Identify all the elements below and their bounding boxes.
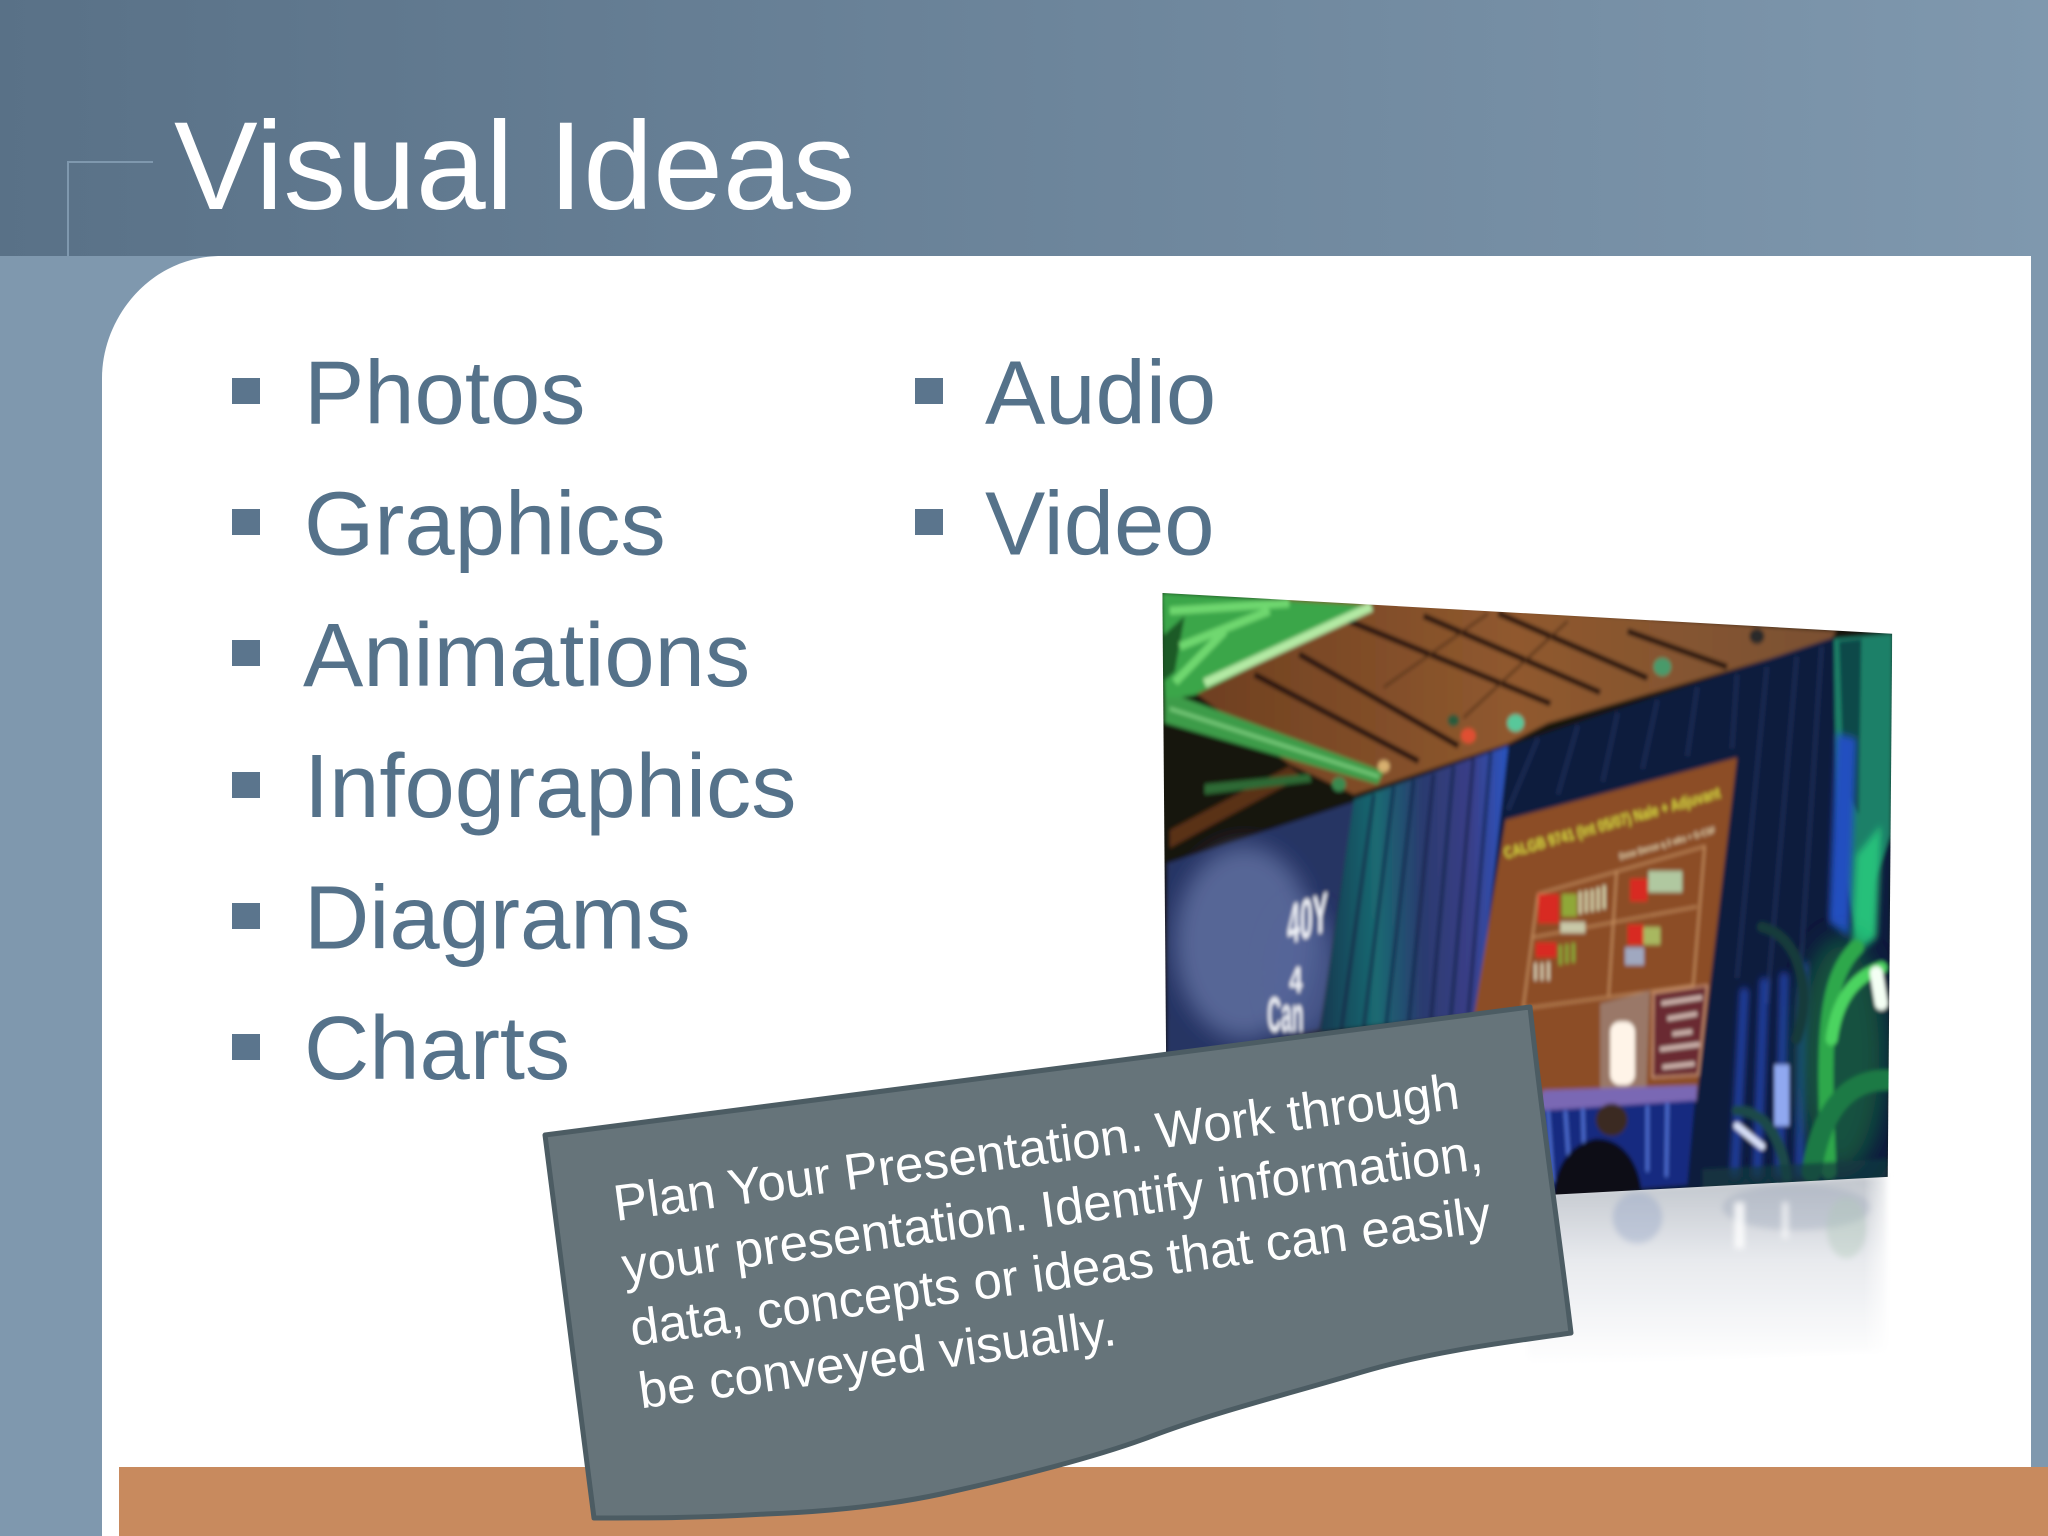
dark curtain xyxy=(1478,634,1892,1195)
left banner xyxy=(1167,802,1354,1062)
slide bars xyxy=(1538,894,1559,923)
projection screen xyxy=(1458,758,1737,1113)
item: Graphics: Graphics xyxy=(304,474,666,575)
header bracket line xyxy=(68,162,153,256)
green truss xyxy=(1162,593,1374,700)
bullet list: right column xyxy=(915,342,1216,575)
blue drape under screen xyxy=(1540,1100,1695,1195)
banner lettering xyxy=(1267,881,1328,1042)
title: Visual Ideas xyxy=(174,95,855,236)
teal curtain xyxy=(1320,746,1508,1032)
stage lights xyxy=(1461,728,1476,743)
photo reflection xyxy=(1528,1167,1894,1371)
item: Diagrams: Diagrams xyxy=(304,867,691,968)
header band xyxy=(0,0,2048,256)
banner lettering: 40Y xyxy=(1287,881,1328,958)
ceiling xyxy=(1195,596,1836,794)
item: Infographics: Infographics xyxy=(304,736,796,837)
bullet list: left column xyxy=(232,342,796,1099)
item: Animations: Animations xyxy=(303,605,750,706)
photo: conference stage with projected slide and floor reflection xyxy=(1140,570,1936,1371)
green and blue stage wash xyxy=(1834,634,1892,937)
callout text: data, concepts or ideas that can easily xyxy=(627,1185,1495,1357)
callout text xyxy=(610,1061,1503,1419)
stage plant xyxy=(1737,927,1886,1177)
item: Photos: Photos xyxy=(304,342,585,444)
banner lettering: 4 xyxy=(1289,959,1303,1001)
slide table xyxy=(1523,846,1705,1009)
white content panel xyxy=(102,256,2031,1536)
item: Charts: Charts xyxy=(304,998,570,1099)
dark beams xyxy=(1170,766,1302,848)
callout: plan your presentation xyxy=(545,1007,1571,1518)
item: Video: Video xyxy=(985,474,1215,575)
callout text: Plan Your Presentation. Work through xyxy=(610,1063,1462,1232)
photo image xyxy=(1162,593,1892,1195)
slide title: CALGB 9741 (Int 05/07) Nale + Adjuvant xyxy=(1502,785,1722,863)
slide portrait and side box xyxy=(1600,991,1650,1090)
callout wave shape xyxy=(545,1007,1571,1518)
banner lettering: Can xyxy=(1267,987,1303,1042)
callout text: your presentation. Identify information, xyxy=(618,1123,1486,1294)
audience silhouette xyxy=(1596,1103,1628,1136)
item: Audio: Audio xyxy=(985,342,1216,444)
orange footer bar xyxy=(119,1467,2048,1536)
callout text: be conveyed visually. xyxy=(635,1299,1119,1419)
photo image: Dose Dense q 2 wks + G-CSF xyxy=(1618,825,1716,862)
